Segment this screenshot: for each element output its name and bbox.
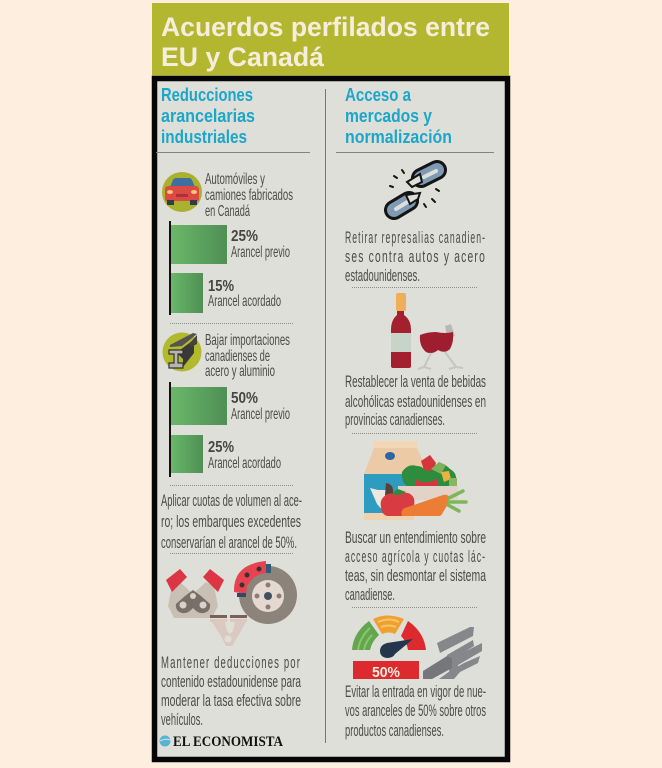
text: entendimiento: acceso agrícola y cuotas lác-: [345, 547, 486, 566]
bar chart: automóviles: 15%: [208, 278, 234, 295]
icon: broken chain: [390, 170, 439, 210]
bar chart: acero y aluminio: Arancel acordado: [208, 455, 281, 472]
text: automóviles y camiones: en Canadá: [205, 203, 250, 220]
icon: gauge 50% and steel: 50%: [372, 664, 400, 681]
text: deducciones: Mantener deducciones por: [161, 653, 301, 672]
heading: reducciones arancelarias industriales: arancelarias: [161, 106, 255, 126]
logo: El Economista: EL ECONOMISTA: [173, 734, 283, 750]
title: Acuerdos perfilados entre: [161, 12, 490, 42]
heading: acceso a mercados y normalización: normalización: [345, 127, 452, 147]
text: deducciones: [161, 653, 301, 729]
bar chart: automóviles: 25%: [231, 228, 258, 245]
text: restablecer: Restablecer la venta de bebidas: [345, 372, 486, 391]
title: [152, 3, 509, 76]
text: restablecer: provincias canadienses.: [345, 410, 445, 429]
text: entendimiento: Buscar un entendimiento sobre: [345, 528, 486, 547]
text: restablecer: alcohólicas estadounidenses en: [345, 392, 486, 411]
text: evitar la entrada: productos canadienses.: [345, 721, 444, 740]
text: retirar represalias: ses contra autos y acero: [345, 247, 486, 266]
text: bajar importaciones: [205, 332, 290, 380]
text: restablecer: [345, 372, 486, 429]
text: bajar importaciones: acero y aluminio: [205, 363, 275, 380]
icon: milk carton and vegetables: [364, 441, 466, 520]
icon: car: [162, 172, 202, 212]
heading: acceso a mercados y normalización: [345, 85, 452, 147]
icon: engine, piston and brake disc: [166, 561, 297, 646]
bar chart: automóviles: Arancel acordado: [208, 293, 281, 310]
text: deducciones: vehículos.: [161, 710, 203, 729]
icon: wine bottle and glass: [391, 293, 463, 369]
text: cuotas de volumen: ro; los embarques excedentes: [161, 512, 301, 531]
heading: acceso a mercados y normalización: mercados y: [345, 106, 432, 126]
bar chart: acero y aluminio: [169, 382, 290, 477]
text: bajar importaciones: canadienses de: [205, 348, 270, 365]
text: evitar la entrada: [345, 682, 486, 740]
bar chart: acero y aluminio: 50%: [231, 390, 258, 407]
heading: reducciones arancelarias industriales: industriales: [161, 127, 247, 147]
text: deducciones: moderar la tasa efectiva sobre: [161, 691, 301, 710]
text: retirar represalias: [345, 228, 486, 285]
bar chart: acero y aluminio: Arancel previo: [231, 406, 290, 423]
bar chart: automóviles: Arancel previo: [231, 244, 290, 261]
text: evitar la entrada: vos aranceles de 50% sobre otros: [345, 701, 486, 720]
text: deducciones: contenido estadounidense para: [161, 672, 301, 691]
panel: main frame: [154, 78, 508, 760]
heading: reducciones arancelarias industriales: Reducciones: [161, 85, 253, 105]
text: evitar la entrada: Evitar la entrada en vigor de nue-: [345, 682, 486, 701]
text: entendimiento: teas, sin desmontar el sistema: [345, 566, 486, 585]
text: retirar represalias: estadounidenses.: [345, 266, 420, 285]
text: bajar importaciones: Bajar importaciones: [205, 332, 290, 349]
icon: steel beam: [162, 332, 202, 372]
heading: acceso a mercados y normalización: Acceso a: [345, 85, 412, 105]
text: entendimiento: canadiense.: [345, 585, 395, 604]
text: automóviles y camiones: [205, 171, 293, 220]
text: cuotas de volumen: [161, 491, 302, 552]
bar chart: acero y aluminio: 25%: [208, 439, 234, 456]
bar chart: automóviles: [169, 221, 290, 315]
text: cuotas de volumen: conservarían el arancel de 50%.: [161, 533, 297, 552]
title: EU y Canadá: [161, 42, 325, 72]
text: entendimiento: [345, 528, 486, 604]
text: retirar represalias: Retirar represalias canadien-: [345, 228, 486, 247]
icon: gauge 50% and steel: [352, 616, 482, 681]
text: automóviles y camiones: camiones fabricados: [205, 187, 293, 204]
text: automóviles y camiones: Automóviles y: [205, 171, 265, 188]
text: cuotas de volumen: Aplicar cuotas de volumen al ace-: [161, 491, 302, 510]
heading: reducciones arancelarias industriales: [161, 85, 255, 147]
